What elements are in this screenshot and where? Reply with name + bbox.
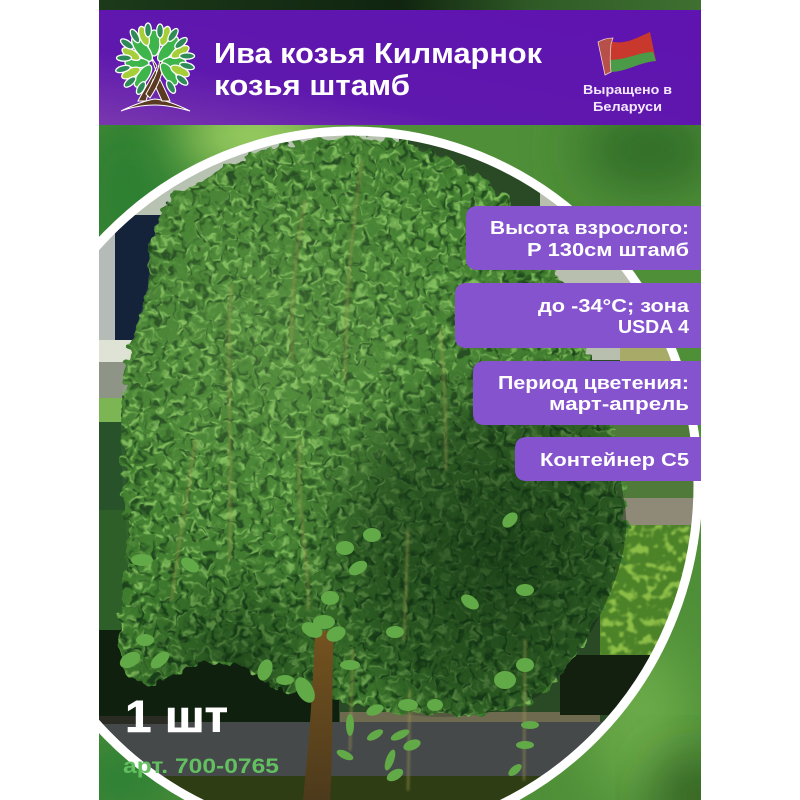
label: grown in Belarus: Беларуси	[593, 99, 662, 114]
panel: container: Контейнер С5	[540, 450, 689, 470]
panel: hardiness	[455, 283, 701, 348]
flag: Belarus	[598, 32, 656, 75]
photo: weeping willow in circular frame	[99, 120, 701, 800]
panel: height: Высота взрослого:	[490, 218, 689, 238]
background: blurred green backdrop	[99, 0, 701, 800]
title: козья штамб	[214, 70, 410, 102]
panel: container	[515, 437, 701, 481]
tree crown: foliage	[116, 136, 632, 718]
label: grown in Belarus: Выращено в	[583, 82, 672, 97]
logo ground and trunk	[121, 56, 190, 111]
white circular frame	[99, 126, 701, 800]
panel: flowering period: Период цветения:	[498, 373, 689, 393]
label: grown in Belarus	[583, 82, 672, 114]
logo: tree	[115, 23, 195, 111]
panel: flowering period	[473, 361, 701, 425]
panel: height	[466, 206, 701, 270]
quantity label: 1 шт	[125, 691, 228, 742]
foliage shading	[122, 142, 626, 717]
bright leaves	[117, 509, 539, 784]
logo leaves	[115, 23, 195, 96]
title: Ива козья Килмарнок	[214, 38, 542, 70]
panel: height: Р 130см штамб	[527, 240, 689, 260]
panel: hardiness: до -34°С; зона	[538, 296, 690, 316]
panel: hardiness: USDA 4	[618, 317, 689, 337]
photo background: garden	[99, 120, 701, 800]
panel: flowering period: март-апрель	[549, 394, 689, 414]
trunk	[303, 630, 334, 800]
hanging branches	[172, 160, 525, 790]
title	[214, 38, 542, 102]
header banner	[99, 10, 701, 125]
article number: арт. 700-0765	[123, 755, 279, 778]
